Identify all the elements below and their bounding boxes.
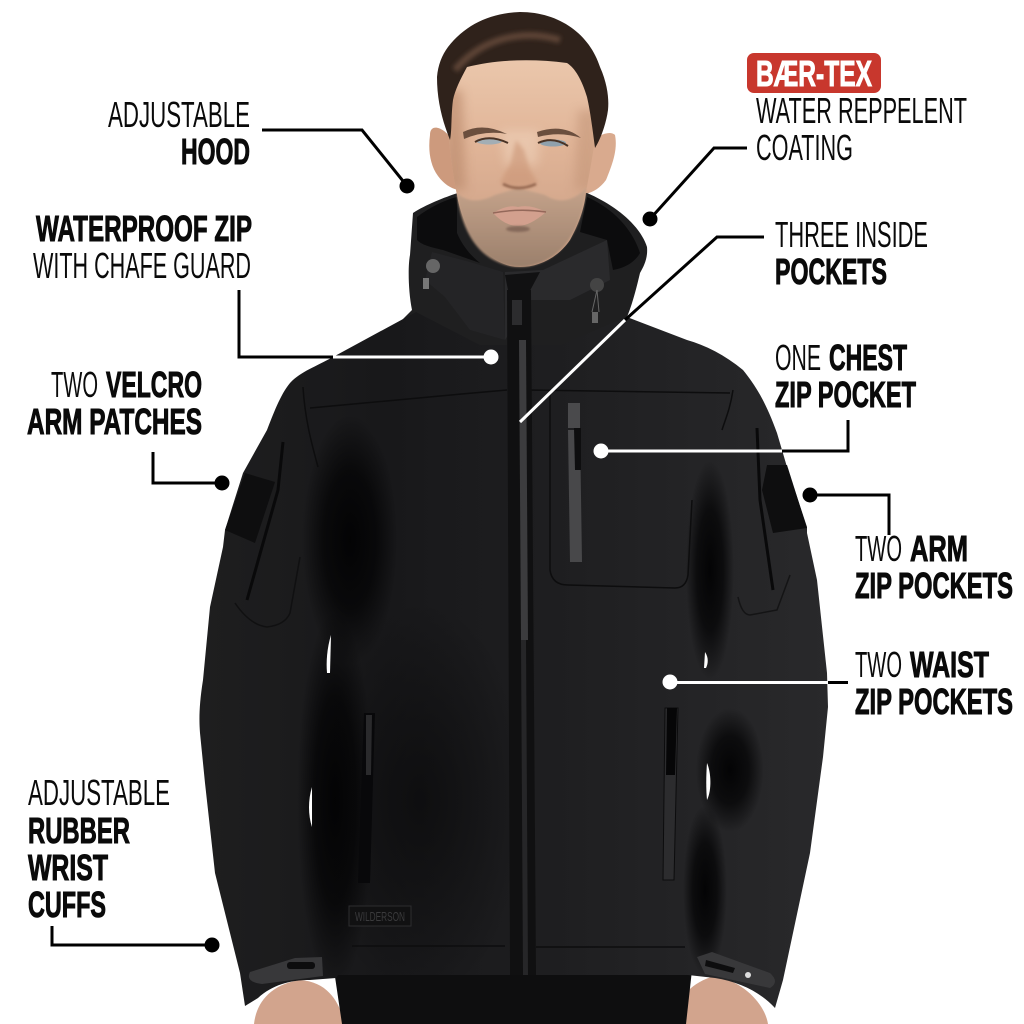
trousers bbox=[334, 970, 692, 1024]
annotation: rubber wrist cuffs bbox=[28, 772, 220, 952]
annotation: adjustable hood bbox=[108, 94, 414, 194]
annotation: three inside pockets: POCKETS bbox=[775, 251, 887, 292]
annotation: velcro arm patches: ARM PATCHES bbox=[27, 401, 202, 442]
annotation: adjustable hood: HOOD bbox=[181, 131, 250, 172]
arm zip pockets bbox=[247, 428, 773, 600]
chest zip pocket bbox=[568, 403, 582, 562]
annotation: waterproof zip bbox=[33, 208, 498, 364]
beard bbox=[457, 188, 586, 267]
lips bbox=[493, 206, 546, 226]
hair bbox=[437, 12, 608, 148]
drawcord toggles bbox=[423, 259, 604, 323]
badge bbox=[747, 53, 881, 94]
rubber cuffs bbox=[249, 952, 775, 988]
brows and eyes bbox=[463, 127, 581, 146]
annotation: adjustable hood: ADJUSTABLE bbox=[108, 94, 250, 135]
annotation: velcro arm patches: TWO bbox=[51, 364, 98, 405]
face shading bbox=[445, 90, 598, 190]
hands bbox=[254, 976, 768, 1024]
annotation: rubber wrist cuffs: WRIST bbox=[28, 847, 108, 888]
annotation: velcro arm patches bbox=[27, 364, 230, 490]
jacket shading bbox=[305, 442, 760, 956]
front zip bbox=[507, 290, 536, 975]
hood inner left bbox=[417, 197, 480, 263]
jacket body and sleeves bbox=[199, 290, 828, 1008]
collar flaps bbox=[505, 240, 610, 340]
ears bbox=[429, 128, 616, 194]
badge: BÆR-TEX bbox=[756, 53, 872, 94]
annotation: rubber wrist cuffs: RUBBER bbox=[28, 810, 130, 851]
annotation: waist zip pockets: WAIST bbox=[910, 644, 989, 685]
annotation: arm zip pockets bbox=[802, 488, 1013, 606]
seams bbox=[235, 387, 790, 947]
annotation: baer-tex coating: COATING bbox=[756, 127, 853, 168]
annotation: chest zip pocket: ZIP POCKET bbox=[775, 374, 916, 415]
annotation: rubber wrist cuffs: ADJUSTABLE bbox=[28, 772, 170, 813]
annotation: three inside pockets: THREE INSIDE bbox=[775, 214, 928, 255]
hood inner right bbox=[580, 197, 640, 270]
annotation: three inside pockets bbox=[520, 214, 928, 422]
annotation: chest zip pocket: CHEST bbox=[829, 337, 907, 378]
annotation: velcro arm patches: VELCRO bbox=[106, 364, 202, 405]
hood bbox=[400, 193, 660, 350]
head bbox=[437, 12, 608, 267]
annotation: chest zip pocket: ONE bbox=[775, 337, 821, 378]
logo patch bbox=[349, 906, 411, 926]
neck bbox=[458, 195, 588, 280]
annotation: chest zip pocket bbox=[594, 337, 916, 458]
annotation: arm zip pockets: TWO bbox=[855, 528, 902, 569]
annotation: waterproof zip: WATERPROOF ZIP bbox=[36, 208, 252, 249]
annotation: rubber wrist cuffs: CUFFS bbox=[28, 884, 106, 925]
nose bbox=[500, 140, 538, 188]
annotation: waist zip pockets bbox=[662, 644, 1013, 722]
annotation: waterproof zip: WITH CHAFE GUARD bbox=[33, 245, 251, 286]
annotation: waist zip pockets: TWO bbox=[855, 644, 902, 685]
waist zip pockets bbox=[358, 708, 678, 883]
white gaps between arms and body bbox=[309, 635, 710, 827]
annotation: baer-tex coating bbox=[642, 53, 967, 226]
annotation: arm zip pockets: ARM bbox=[910, 528, 968, 569]
logo patch: WILDERSON bbox=[355, 909, 405, 924]
velcro patches bbox=[225, 465, 807, 543]
